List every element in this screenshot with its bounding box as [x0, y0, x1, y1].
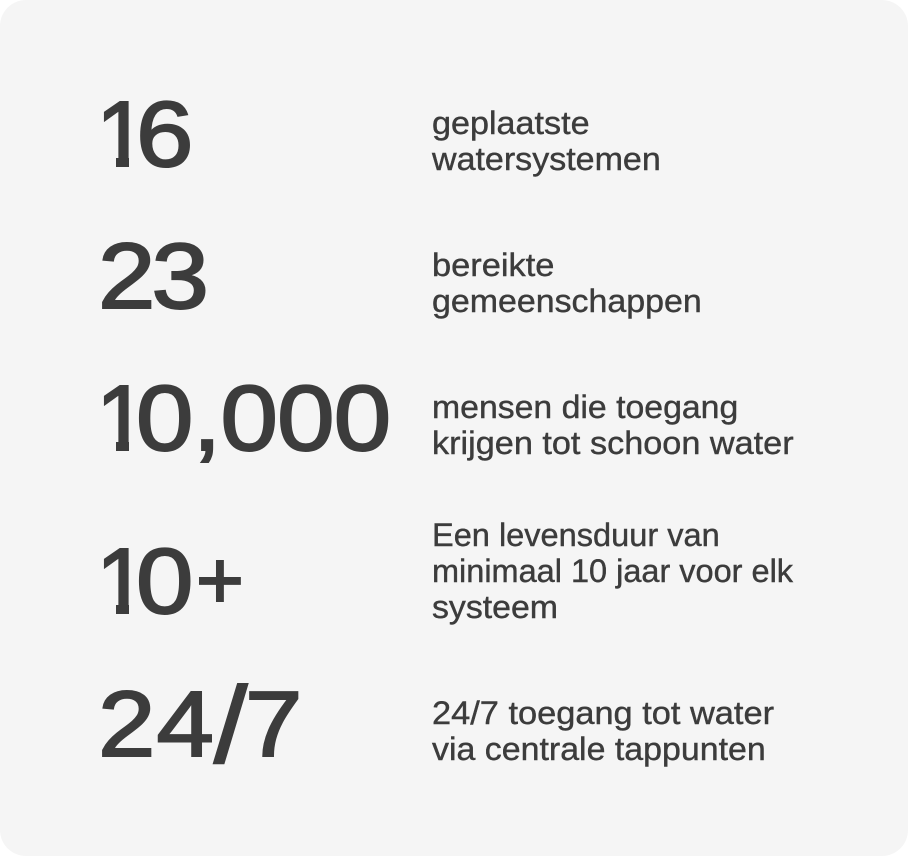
number: 16: 1: [96, 82, 148, 186]
label: people with access: mensen die toegang: [432, 389, 738, 425]
label: system lifespan: minimaal 10 jaar voor elk: [432, 553, 793, 589]
number: 10+: [104, 529, 244, 633]
number: 10,000: 0,000: [136, 366, 390, 470]
number: 16: 6: [136, 82, 193, 186]
label: people with access: [432, 389, 794, 461]
stat rows: [102, 100, 794, 767]
label: communities reached: bereikte: [432, 247, 554, 283]
number: 10+: 0: [136, 529, 193, 633]
label: system lifespan: [432, 517, 794, 625]
label: systems placed: [432, 105, 661, 177]
label: people with access: krijgen tot schoon water: [432, 425, 794, 461]
number: 24/7: 24/7: [98, 664, 304, 785]
label: system lifespan: Een levensduur van: [432, 517, 720, 553]
label: system lifespan: systeem: [432, 589, 558, 625]
label: systems placed: geplaatste: [432, 105, 590, 141]
label: round the clock access: [432, 695, 774, 767]
number: 10,000: 1: [96, 366, 148, 470]
label: round the clock access: 24/7 toegang tot water: [432, 695, 774, 731]
number: 10+: 1: [96, 529, 148, 633]
stat rows: +: [196, 535, 244, 626]
label: communities reached: gemeenschappen: [432, 283, 702, 319]
number: 16: [104, 82, 193, 186]
label: systems placed: watersystemen: [432, 141, 661, 177]
label: communities reached: [432, 247, 702, 319]
label: round the clock access: via centrale tappunten: [432, 731, 766, 767]
number: 23: 23: [98, 224, 205, 328]
